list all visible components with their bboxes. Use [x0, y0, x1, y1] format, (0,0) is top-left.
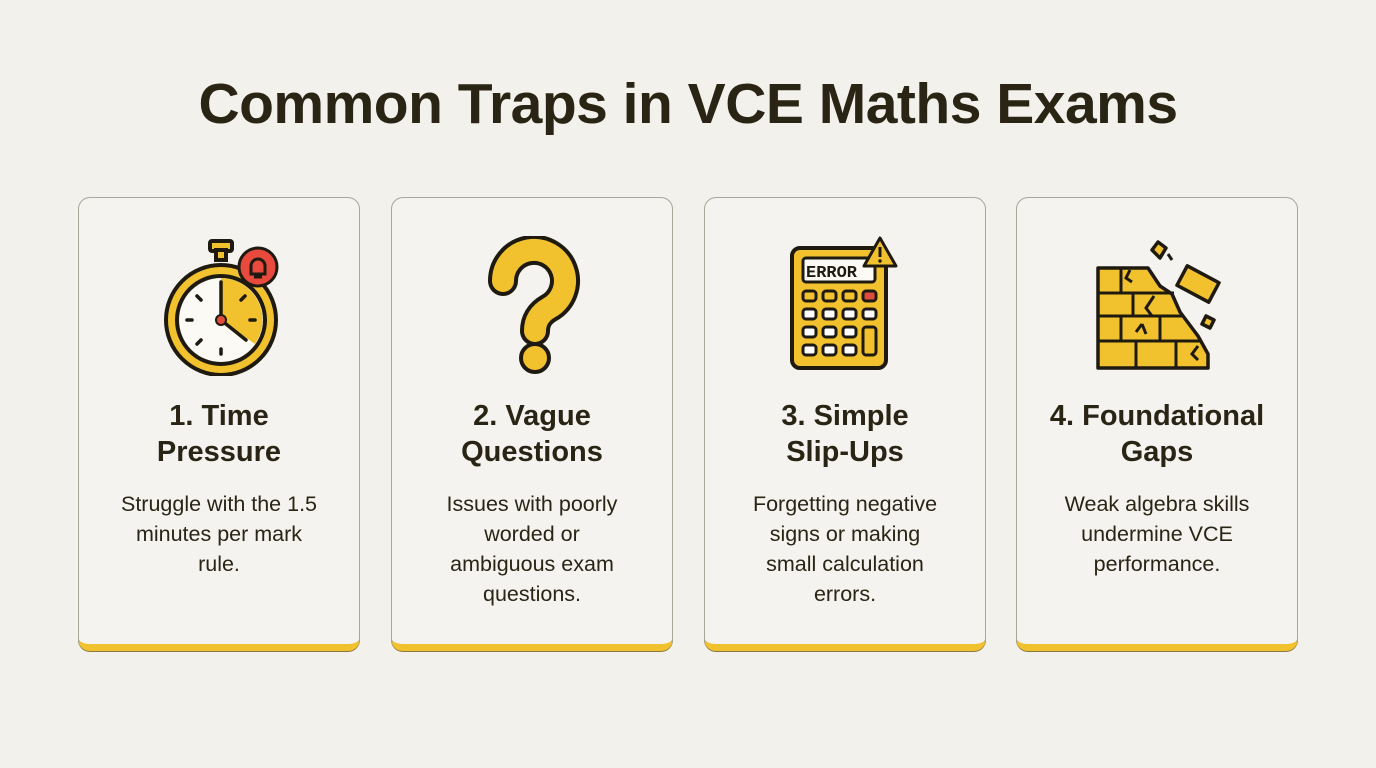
text: small calculation	[766, 552, 924, 576]
title: Common Traps in VCE Maths Exams	[198, 72, 1178, 136]
text: Weak algebra skills	[1065, 492, 1249, 516]
icon: stopwatch	[164, 239, 278, 376]
text: rule.	[198, 552, 240, 576]
icon: calculator error	[790, 236, 898, 370]
heading	[1050, 400, 1264, 468]
heading: 3. Simple	[781, 400, 909, 432]
text: worded or	[484, 522, 580, 546]
heading: 4. Foundational	[1050, 400, 1264, 432]
heading: 2. Vague	[473, 400, 591, 432]
text: Forgetting negative	[753, 492, 937, 516]
text: Struggle with the 1.5	[121, 492, 317, 516]
text: signs or making	[770, 522, 920, 546]
text: Issues with poorly	[447, 492, 617, 516]
text: ambiguous exam	[450, 552, 614, 576]
text	[1064, 492, 1249, 576]
panel: foundational gaps	[1016, 197, 1298, 651]
heading	[461, 400, 603, 468]
text	[753, 492, 937, 606]
text: errors.	[814, 582, 876, 606]
heading	[781, 400, 909, 468]
heading: Slip-Ups	[786, 436, 904, 468]
icon: crumbling brick wall	[1096, 240, 1221, 370]
heading: Pressure	[157, 436, 281, 468]
text: minutes per mark	[136, 522, 302, 546]
text: questions.	[483, 582, 581, 606]
heading: Gaps	[1121, 436, 1193, 468]
text	[447, 492, 618, 606]
icon: calculator error: ERROR	[806, 264, 858, 283]
heading: 1. Time	[169, 400, 269, 432]
panel: simple slip-ups	[704, 197, 986, 651]
heading: Questions	[461, 436, 603, 468]
icon: question mark	[488, 236, 580, 374]
text	[121, 492, 317, 576]
panel: vague questions	[391, 197, 673, 651]
heading	[157, 400, 281, 468]
panel: time pressure	[78, 197, 360, 651]
text: performance.	[1094, 552, 1220, 576]
text: undermine VCE	[1081, 522, 1233, 546]
